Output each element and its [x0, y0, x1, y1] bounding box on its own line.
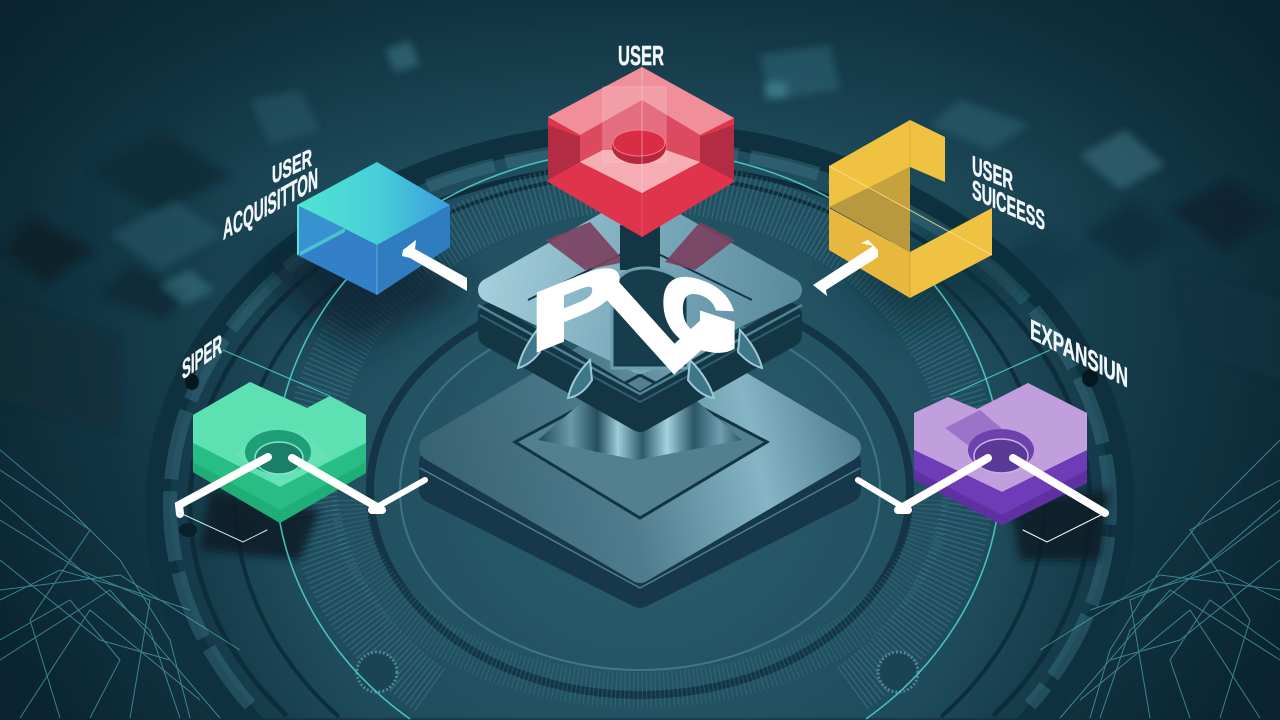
connector: siper label — [223, 350, 330, 396]
connectors: expansion — [858, 458, 1105, 542]
cube: siper (green) — [193, 382, 366, 523]
text: ACQUISITTON — [223, 161, 318, 247]
network lines: left — [0, 450, 240, 718]
upper plate — [478, 205, 802, 420]
label: USER SUICEESS: SUICEESS — [972, 173, 1045, 236]
label: USER SUICEESS — [972, 150, 1045, 236]
label: USER ACQUISITION: USER — [272, 143, 312, 190]
label: USER top: USER — [618, 40, 664, 71]
support claws — [518, 330, 762, 398]
text: SIPER — [182, 329, 222, 386]
label: USER SUICEESS: USER — [972, 150, 1013, 196]
cube: expansion (purple) — [914, 383, 1087, 525]
connector: expansion label — [950, 350, 1050, 395]
arrow: acquisition to platform — [402, 240, 467, 291]
concentric machine disc — [145, 122, 1135, 719]
connectors: siper — [178, 457, 425, 542]
title: PLG: L — [577, 228, 741, 400]
label: USER ACQUISITION — [223, 143, 318, 247]
lower platform — [420, 325, 860, 595]
cube: user success (yellow) — [829, 120, 992, 298]
title: PLG: P — [532, 244, 620, 369]
arrow: success to platform — [813, 240, 878, 296]
title: PLG: G — [662, 252, 738, 379]
label: EXPANSIUN: EXPANSIUN — [1030, 314, 1128, 395]
cube: user acquisition (blue) — [297, 162, 450, 295]
title: PLG — [532, 228, 741, 400]
network lines: right — [1040, 440, 1280, 718]
cube: user (red) — [548, 67, 734, 237]
